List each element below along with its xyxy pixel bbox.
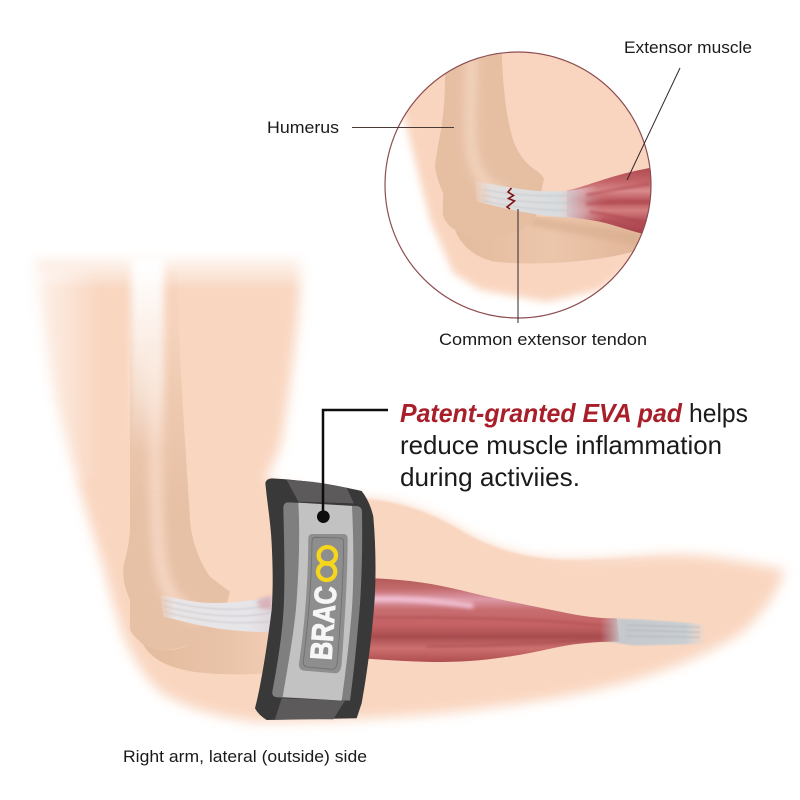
upper arm top fade bbox=[0, 240, 340, 290]
inset tendon bbox=[475, 181, 613, 221]
callout text: Patent-granted EVA pad bbox=[400, 398, 683, 428]
connector line to pad bbox=[323, 410, 388, 517]
inset humerus bbox=[435, 50, 544, 240]
inset ulna bbox=[455, 217, 647, 263]
pale gap above the elbow bbox=[131, 257, 164, 452]
forearm crisp upper edge bbox=[300, 492, 700, 620]
inset circle bbox=[384, 51, 652, 319]
inset shadow below tendon bbox=[532, 216, 634, 241]
skin silhouette bbox=[35, 252, 785, 722]
callout text: during activiies. bbox=[400, 462, 580, 492]
strap brace bbox=[255, 478, 376, 720]
caption: Right arm, lateral (outside) side bbox=[123, 747, 367, 766]
bone highlight bbox=[155, 353, 200, 620]
strap bottom stripe bbox=[275, 698, 345, 719]
callout text: reduce muscle inflammation bbox=[400, 430, 722, 460]
logo infinity mark bbox=[318, 547, 336, 580]
inner light panel bbox=[283, 503, 353, 701]
tendon tear bbox=[507, 188, 514, 209]
common extensor tendon label: Common extensor tendon bbox=[439, 330, 647, 349]
ulna bbox=[142, 620, 275, 674]
extensor muscle bbox=[363, 578, 705, 662]
outer grey panel bbox=[272, 502, 362, 701]
extensor muscle label: Extensor muscle bbox=[624, 38, 752, 57]
upper arm left fade bbox=[30, 270, 100, 480]
humerus label: Humerus bbox=[267, 119, 339, 137]
callout text bbox=[400, 398, 748, 492]
logo text: BRAC bbox=[304, 585, 343, 661]
inset muscle bbox=[567, 168, 652, 234]
strap top stripe bbox=[287, 480, 354, 503]
humerus and elbow bone bbox=[123, 350, 230, 650]
main arm illustration bbox=[0, 240, 785, 722]
inset skin bbox=[402, 52, 650, 306]
logo plate bbox=[299, 534, 348, 673]
inset outline bbox=[385, 52, 651, 318]
inset bone highlight bbox=[470, 53, 503, 193]
callout text: helps bbox=[689, 398, 748, 428]
distal tendon bbox=[600, 618, 705, 645]
pointer dot bbox=[317, 510, 330, 523]
strap outer bbox=[255, 478, 376, 720]
extensor muscle label bbox=[624, 38, 752, 180]
forearm tendon bbox=[160, 595, 272, 632]
